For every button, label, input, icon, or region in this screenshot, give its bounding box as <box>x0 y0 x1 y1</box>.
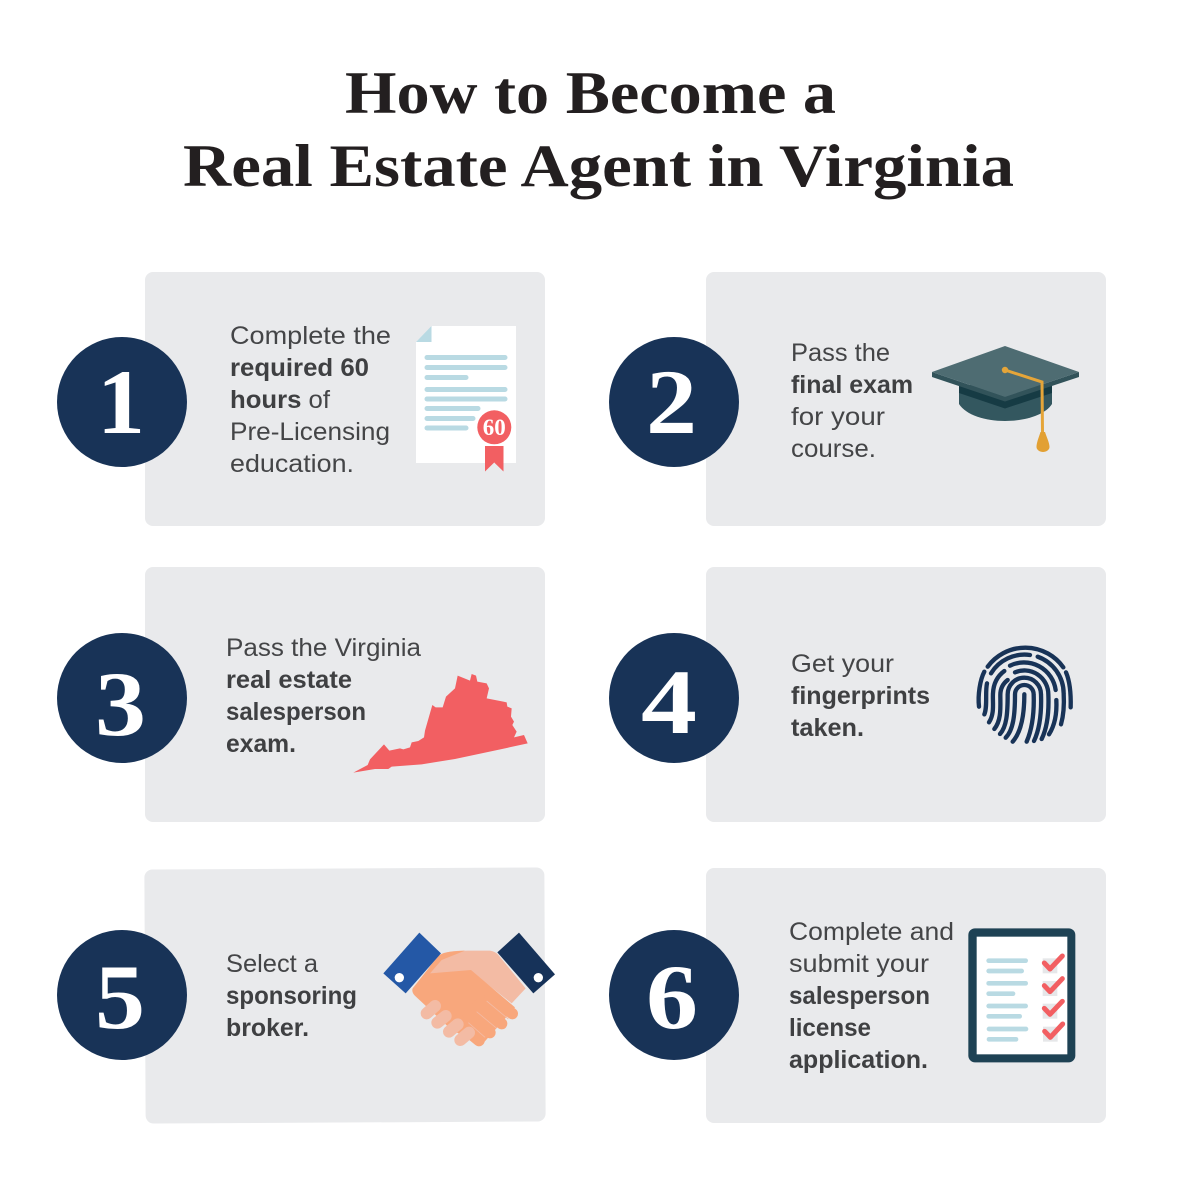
icon: application checklist <box>968 928 1075 1062</box>
title: Real Estate Agent in Virginia <box>183 133 1014 199</box>
title: How to Become a <box>345 60 836 126</box>
number badge 5: 5 <box>95 946 145 1048</box>
step 6 text: license <box>789 1014 871 1042</box>
step 3 text: Pass the Virginia <box>226 634 421 662</box>
step 1 text <box>230 322 391 478</box>
step 4 text: fingerprints <box>791 682 930 710</box>
step 4 text: Get your <box>791 650 894 678</box>
step 5 text: Select a <box>226 950 318 978</box>
icon: Virginia state map <box>353 674 528 773</box>
number badge 2 <box>609 337 739 467</box>
panel: step 3 <box>57 567 545 822</box>
step 2 text: for your <box>791 403 885 431</box>
number badge 5 <box>57 930 187 1060</box>
panel: step 1 <box>57 272 545 526</box>
step 3 text: exam. <box>226 730 296 758</box>
step 4 text <box>791 650 930 742</box>
step 5 text <box>226 950 357 1042</box>
number badge 2: 2 <box>646 351 697 453</box>
number badge 1 <box>57 337 187 467</box>
icon: graduation cap <box>932 346 1079 452</box>
number badge 1: 1 <box>97 351 145 453</box>
step 3 text: salesperson <box>226 698 366 726</box>
step 6 text <box>789 918 954 1074</box>
step 1 text: education. <box>230 450 354 478</box>
step 6 text: application. <box>789 1046 928 1074</box>
step 5 text: broker. <box>226 1014 309 1042</box>
panel: step 5 <box>57 867 555 1124</box>
number badge 3: 3 <box>95 653 146 755</box>
panel: step 6 <box>609 868 1106 1123</box>
number badge 6 <box>609 930 739 1060</box>
step 4 text: taken. <box>791 714 864 742</box>
step 2 text: course. <box>791 435 876 463</box>
panel: step 4 <box>609 567 1106 822</box>
icon: fingerprint <box>979 648 1071 742</box>
title <box>183 60 1014 199</box>
step 2 text: Pass the <box>791 339 890 367</box>
number badge 6: 6 <box>646 946 698 1048</box>
number badge 4: 4 <box>641 651 697 753</box>
panel: step 2 <box>609 272 1106 526</box>
step 1 text: hours of <box>230 386 330 414</box>
step 6 text: submit your <box>789 950 929 978</box>
icon: certificate document with 60 badge: 60 <box>483 415 506 440</box>
number badge 3 <box>57 633 187 763</box>
step 1 text: required 60 <box>230 354 369 382</box>
step 2 text <box>791 339 913 463</box>
number badge 4 <box>609 633 739 763</box>
step 2 text: final exam <box>791 371 913 399</box>
step 1 text: Complete the <box>230 322 391 350</box>
icon: certificate document with 60 badge <box>416 326 516 472</box>
step 3 text <box>226 634 421 758</box>
step 1 text: Pre-Licensing <box>230 418 390 446</box>
icon: handshake <box>383 933 555 1045</box>
step 5 text: sponsoring <box>226 982 357 1010</box>
step 3 text: real estate <box>226 666 352 694</box>
step 6 text: salesperson <box>789 982 930 1010</box>
step 6 text: Complete and <box>789 918 954 946</box>
